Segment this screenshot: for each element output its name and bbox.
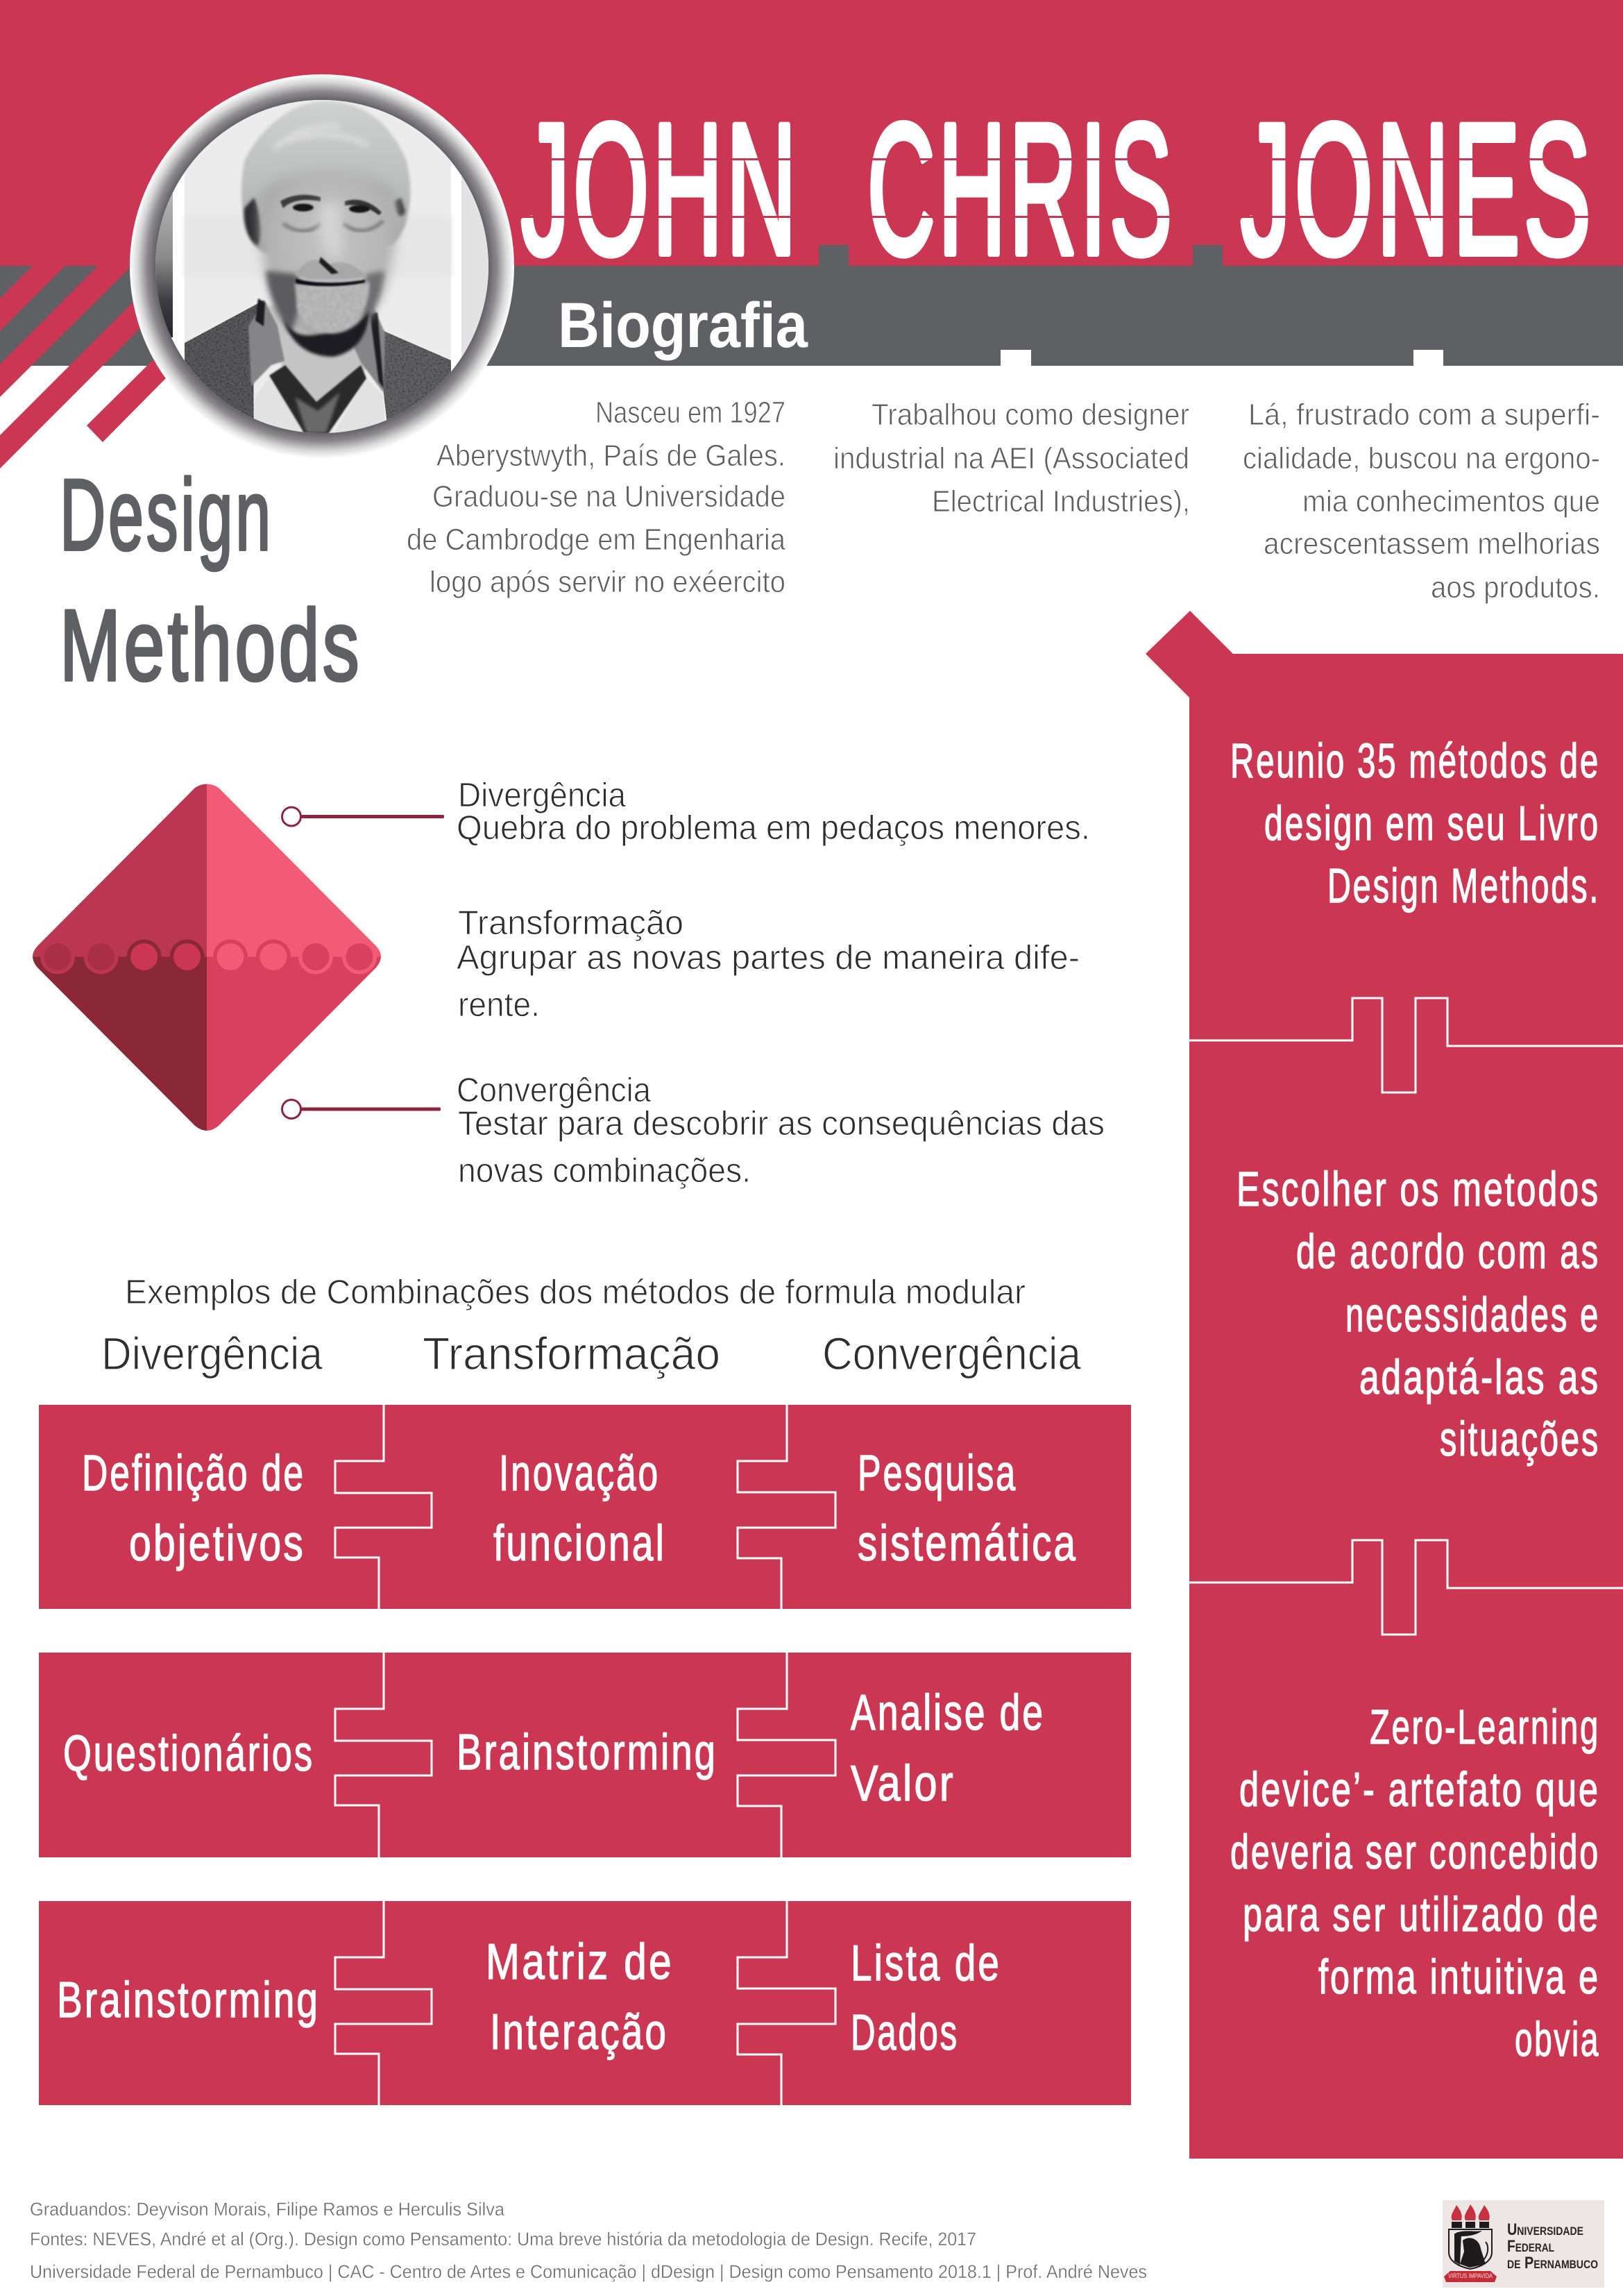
panel: combination row 1 [39,1405,1131,1609]
column headings: Divergência [101,1328,323,1379]
footer credits [30,2199,1147,2282]
neck and collar [267,305,371,404]
panel: red header band [0,0,1623,266]
text block: divergência: Quebra do problema em pedaços menores. [457,809,1090,847]
face [260,169,396,340]
portrait: John Chris Jones [130,74,514,459]
text block: biography column 2 [833,398,1190,518]
jacket [185,300,264,419]
icon: shield with lion [1449,2229,1492,2269]
heading: Design Methods: Methods [60,589,362,702]
column headings [101,1328,1081,1379]
tie [269,365,366,437]
text block: biography column 1: logo após servir no exéercito [430,565,785,599]
text block: convergência [457,1072,1105,1190]
text block: Reunio 35 métodos [1230,734,1600,913]
text block: biography column 3 [1243,398,1600,605]
panel: combination row 3: Lista de [851,1936,1001,1991]
title: John Chris Jones: JOHN [521,85,800,293]
panel: combination row 1: objetivos [129,1516,305,1571]
panel: combination row 3: Matriz de [486,1934,674,1990]
panel: combination row 1: funcional [493,1516,666,1571]
text block: divergência: Divergência [458,777,627,814]
text block: biography column 2: Trabalhou como designer [872,398,1189,432]
text block: biography column 3: aos produtos. [1431,571,1600,605]
heading: examples of combinations: Exemplos de Combinações dos métodos de formula modular [125,1274,1026,1311]
text block: convergência: Testar para descobrir as consequências das [458,1105,1105,1142]
heading: Biografia: Biografia [558,290,808,361]
panel: combination row 3: Brainstorming [57,1973,320,2028]
text block: biography column 2: Electrical Industries), [932,484,1190,518]
text block: biography column 3: acrescentassem melhorias [1264,527,1600,561]
icon: torches [1452,2204,1490,2228]
title: John Chris Jones [521,85,1595,293]
title stencil cuts [513,158,1603,218]
heading: Design Methods: Design [60,458,273,571]
icon: faceted diamond [28,777,387,1137]
text block: divergência [457,777,1090,847]
panel: combination row 1: sistemática [858,1516,1078,1571]
text block: biography column 3: mia conhecimentos que [1302,484,1600,518]
text block: Escolher os metodos [1237,1162,1600,1466]
panel: combination row 2: Analise de [851,1685,1045,1741]
text block: convergência: Convergência [457,1072,652,1109]
text block: biography column 1 [407,396,785,599]
beard [266,271,303,333]
footer credits: Universidade Federal de Pernambuco | CAC - Centro de Artes e Comunicação | dDesign | Design como Pensamento 2018.1 | Prof. André Neves [30,2261,1147,2282]
panel: combination row 2: Brainstorming [457,1725,717,1780]
logo: UFPE: Universidade [1507,2220,1583,2239]
pointer line: convergência [282,1099,441,1119]
panel: combination row 3 [39,1901,1131,2105]
panel: combination row 1: Pesquisa [858,1446,1017,1501]
diagonal stripes [0,227,241,469]
icon: ribbon with motto [1444,2271,1497,2282]
text block: biography column 1: Aberystwyth, País de Gales. [436,439,785,473]
eyes and brows [280,195,321,208]
footer credits: Graduandos: Deyvison Morais, Filipe Ramos e Herculis Silva [30,2199,505,2220]
hair [241,101,410,253]
nose and mouth [319,257,339,274]
panel: right red column with arrow [1146,611,1623,2159]
footer credits: Fontes: NEVES, André et al (Org.). Design como Pensamento: Uma breve história da metodologia de Design. Recife, 2017 [30,2229,976,2249]
text block: convergência: novas combinações. [458,1152,751,1190]
logo: UFPE: de Pernambuco [1507,2254,1598,2272]
text block: transformação [457,904,1080,1024]
right column connector 2 [1189,1540,1623,1635]
text block: biography column 1: de Cambrodge em Engenharia [407,523,785,557]
panel: combination row 2: Valor [851,1756,955,1812]
text block: biography column 2: industrial na AEI (Associated [833,441,1189,475]
text block: biography column 3: Lá, frustrado com a superfi- [1248,398,1600,432]
text block: Zero-Learning device [1230,1700,1600,2066]
panel: combination row 2 [39,1653,1131,1857]
shirt [254,379,305,432]
column headings: Convergência [822,1328,1081,1379]
heading: Design Methods [60,458,362,702]
logo: UFPE: Federal [1507,2237,1554,2256]
panel: combination row 1: Inovação [499,1446,660,1501]
logo: UFPE [1443,2200,1604,2288]
pointer line: divergência [282,807,444,826]
panel: combination row 1: Definição de [82,1446,305,1501]
text block: biography column 1: Graduou-se na Universidade [432,480,785,514]
text block: transformação: Agrupar as novas partes de maneira dife- [457,939,1080,977]
panel: combination row 3: Dados [851,2005,959,2061]
text block: transformação: Transformação [458,904,683,942]
text block: transformação: rente. [458,986,540,1024]
panel: combination row 3: Interação [490,2004,668,2060]
panel: grey biography band with tabs [0,245,1623,366]
icon: ribbon with motto: VIRTUS IMPAVIDA [1448,2272,1493,2279]
column headings: Transformação [423,1328,720,1379]
panel: combination row 2: Questionários [63,1726,314,1782]
title: John Chris Jones: CHRIS [867,85,1175,293]
text block: biography column 1: Nasceu em 1927 [595,396,785,430]
right column connector 1 [1189,998,1623,1092]
